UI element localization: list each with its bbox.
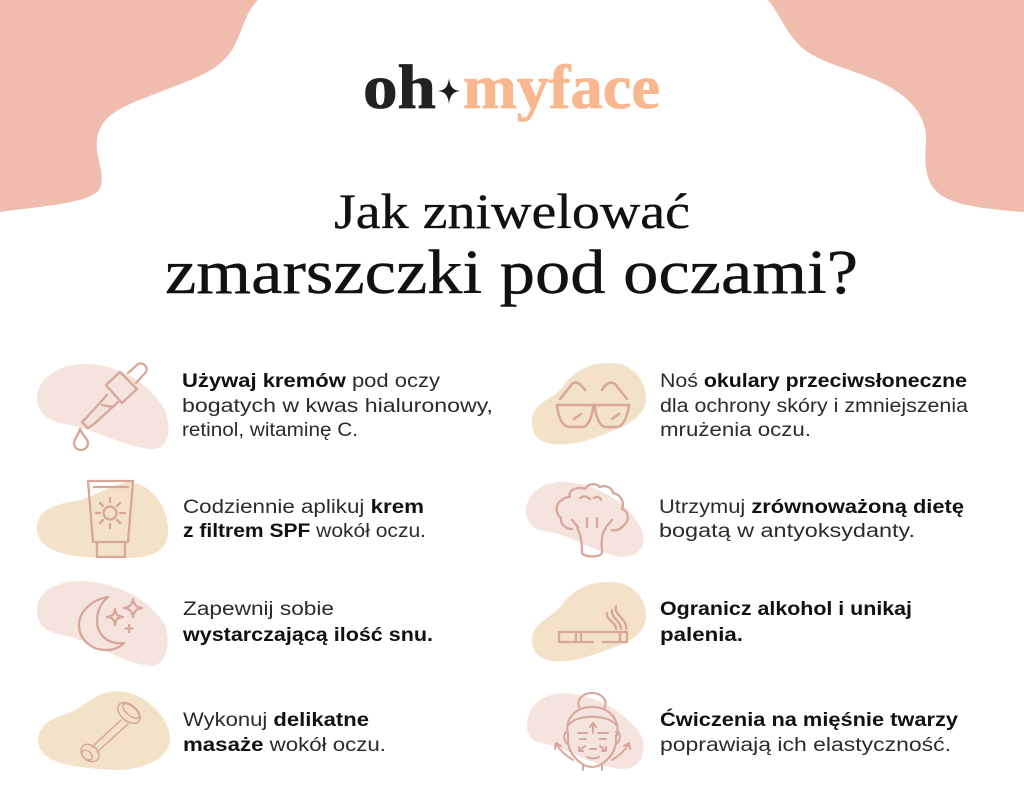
blob [527,693,643,769]
text [660,709,958,756]
text: Ćwiczenia na mięśnie twarzy [660,709,958,731]
text [660,371,968,441]
blob [37,482,168,558]
item 4: massage [38,691,386,770]
logo [363,54,660,122]
text: masaże wokół oczu. [183,735,386,756]
text [660,599,912,646]
title: zmarszczki pod oczami? [165,239,858,307]
text: wystarczającą ilość snu. [182,625,433,646]
right corner shape [768,0,1024,212]
text: Noś okulary przeciwsłoneczne [660,371,967,392]
icon: face roller [78,699,144,765]
blob [38,691,170,770]
text: palenia. [660,625,743,646]
item 1: creams [37,363,493,450]
item 8: face exercises [527,693,958,770]
title: Jak zniwelować [334,183,690,239]
text: dla ochrony skóry i zmniejszenia [660,396,968,417]
text [183,710,386,756]
blob [37,581,168,666]
title [165,183,858,307]
text: bogatych w kwas hialuronowy, [182,396,493,417]
icon: moon and stars [79,597,142,650]
text: Wykonuj delikatne [183,710,369,731]
text: Zapewnij sobie [183,599,334,620]
blob [526,482,643,557]
blob [532,582,646,662]
text: bogatą w antyoksydanty. [659,521,915,542]
icon: cigarette [559,606,627,642]
text: mrużenia oczu. [660,420,811,441]
icon: glasses [557,383,629,427]
icon: sunscreen tube [88,481,133,557]
blob [37,364,169,449]
icon: dropper [74,363,147,450]
text [659,497,964,542]
logo: myface [463,54,660,122]
icon: face [555,693,630,770]
item 6: diet [526,482,964,557]
blob [532,363,646,445]
text: Używaj kremów pod oczy [182,371,441,392]
icon: broccoli [557,484,628,556]
item 2: SPF [37,481,426,558]
text [183,497,426,542]
text: poprawiają ich elastyczność. [660,735,951,756]
text: retinol, witaminę C. [182,420,358,441]
text [182,599,433,646]
text: z filtrem SPF wokół oczu. [183,521,426,542]
item 7: smoking [532,582,912,662]
text: Ogranicz alkohol i unikaj [660,599,912,620]
left corner shape [0,0,258,212]
text: Codziennie aplikuj krem [183,497,424,518]
text [182,371,493,441]
item 5: sunglasses [532,363,968,445]
item 3: sleep [37,581,433,666]
text: Utrzymuj zrównoważoną dietę [659,497,964,518]
logo: oh [363,54,436,122]
